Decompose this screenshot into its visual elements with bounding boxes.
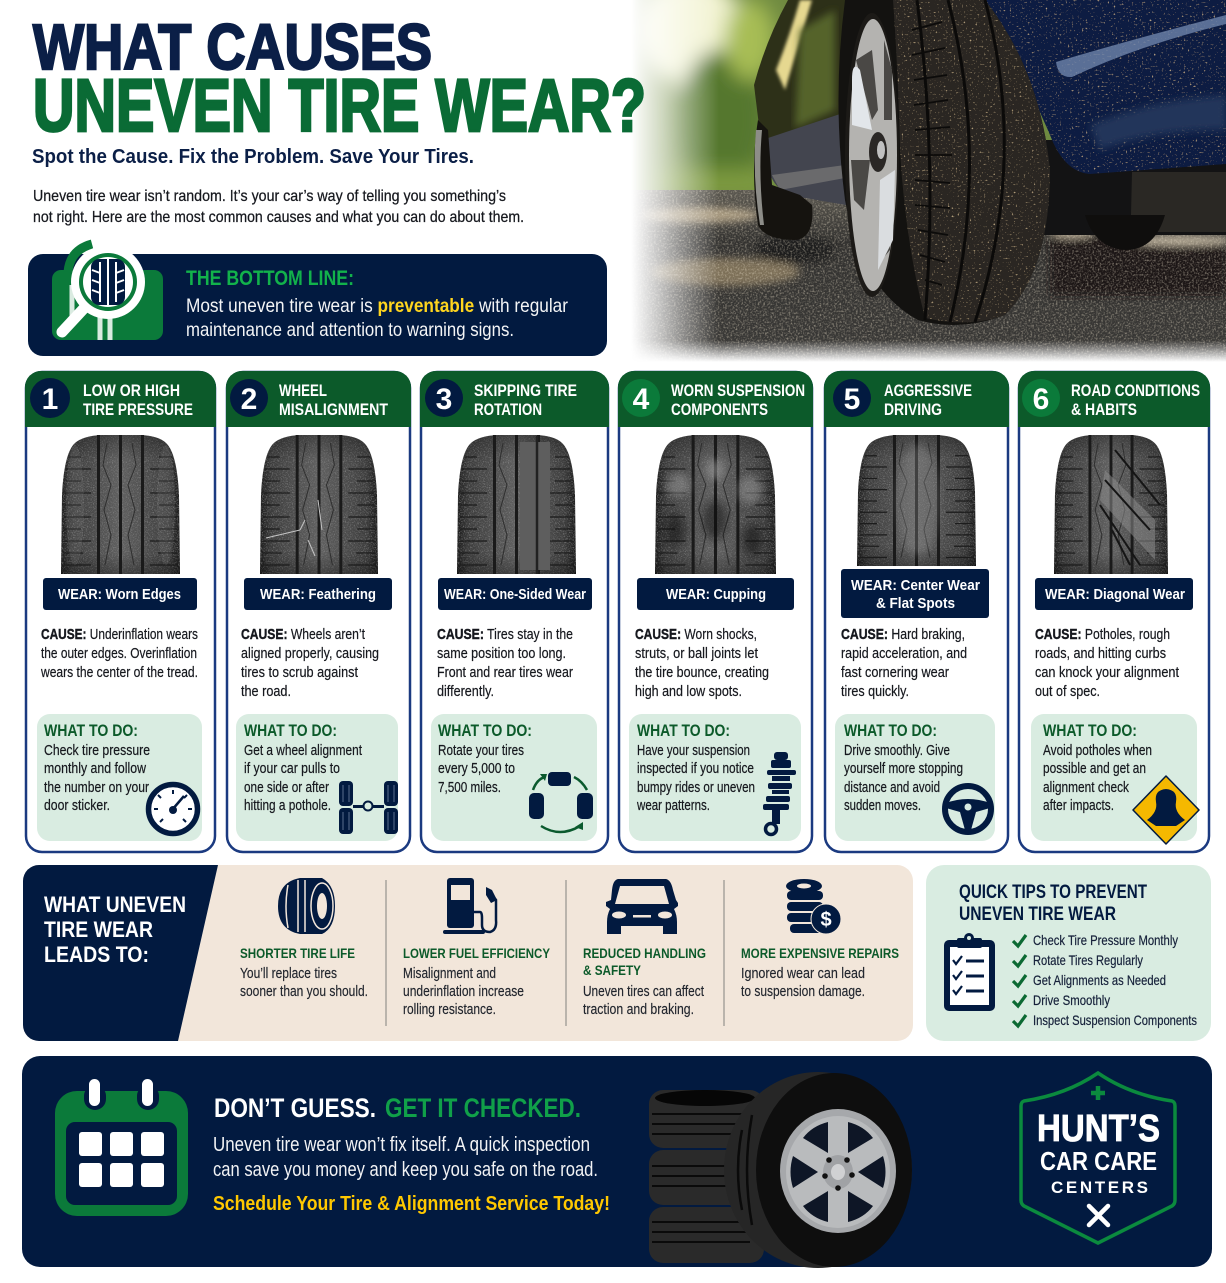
reduced handling and safety: & SAFETY <box>583 962 642 978</box>
tips list: Drive Smoothly <box>1033 992 1110 1008</box>
cause text: fast cornering wear <box>841 665 949 681</box>
number badge: 6 <box>1033 383 1049 416</box>
wear label: WEAR: Feathering <box>260 586 376 603</box>
cause text: struts, or ball joints let <box>635 646 758 662</box>
number badge: 1 <box>42 383 58 416</box>
what to do: distance and avoid <box>844 780 940 796</box>
icon: pothole warning sign <box>1133 776 1199 844</box>
number badge <box>833 379 871 417</box>
wear label <box>244 578 392 610</box>
shorter tire life <box>240 945 368 1000</box>
cta text <box>213 1134 598 1181</box>
lower fuel efficiency: underinflation increase <box>403 984 524 1000</box>
cta schedule line: Schedule Your Tire & Alignment Service Today! <box>213 1193 610 1215</box>
panel: cause 5 aggressive driving <box>824 371 1009 852</box>
what to do <box>629 714 801 841</box>
cause text: tires to scrub against <box>241 665 358 681</box>
heading: WHEEL <box>279 381 327 400</box>
fender <box>985 0 1226 174</box>
front tire <box>838 0 1050 325</box>
bottom line text: maintenance and attention to warning signs. <box>186 319 514 341</box>
tire photo: center wear <box>857 435 976 566</box>
icon: clipboard <box>944 933 995 1011</box>
wear label: WEAR: Worn Edges <box>58 586 181 603</box>
quick tips heading: QUICK TIPS TO PREVENT <box>959 882 1147 903</box>
what to do: after impacts. <box>1043 798 1114 814</box>
leads to heading <box>44 892 186 967</box>
cause text <box>841 627 967 700</box>
heading: SKIPPING TIRE <box>474 381 577 400</box>
tire photo: feathering <box>260 435 378 574</box>
wear label: & Flat Spots <box>876 595 955 612</box>
heading: ROTATION <box>474 400 542 419</box>
hero photo: car tire on road <box>600 0 1226 364</box>
tire photo: one-sided wear <box>457 435 576 574</box>
what to do: the number on your <box>44 780 149 796</box>
more expensive repairs: Ignored wear can lead <box>741 966 865 982</box>
lower fuel efficiency <box>403 945 551 1018</box>
panel: cause 3 skipping tire rotation <box>420 371 609 852</box>
cause text <box>437 627 573 700</box>
what to do: if your car pulls to <box>244 761 340 777</box>
what to do: inspected if you notice <box>637 761 754 777</box>
heading <box>279 381 389 419</box>
what to do <box>1031 714 1197 841</box>
panel: quick tips <box>926 865 1211 1041</box>
wear label <box>1035 578 1193 610</box>
logo: hunt's car care centers: CAR CARE <box>1040 1146 1157 1176</box>
what to do: Get a wheel alignment <box>244 743 362 759</box>
cause text: the outer edges. Overinflation <box>41 646 197 662</box>
lower fuel efficiency: rolling resistance. <box>403 1002 496 1018</box>
reduced handling and safety: REDUCED HANDLING <box>583 945 706 961</box>
what to do: 7,500 miles. <box>438 780 501 796</box>
leads to heading: TIRE WEAR <box>44 917 153 942</box>
tips list <box>1013 932 1197 1028</box>
cause text: roads, and hitting curbs <box>1035 646 1166 662</box>
what to do: bumpy rides or uneven <box>637 780 755 796</box>
what to do: WHAT TO DO: <box>438 722 532 740</box>
tire photo: diagonal wear <box>1054 435 1168 574</box>
logo: hunt's car care centers: CENTERS <box>1051 1178 1148 1197</box>
heading <box>83 381 193 419</box>
lower fuel efficiency: LOWER FUEL EFFICIENCY <box>403 945 551 961</box>
panel: cause 1 low or high tire pressure <box>25 371 216 852</box>
bottom line text <box>186 295 568 341</box>
cause text: CAUSE: Tires stay in the <box>437 627 573 643</box>
cause text: can knock your alignment <box>1035 665 1179 681</box>
what to do: yourself more stopping <box>844 761 963 777</box>
title: UNEVEN TIRE WEAR? <box>33 64 646 147</box>
rear of car <box>754 0 845 138</box>
icon: tires and dollar: $ <box>820 909 832 931</box>
wear label <box>43 578 197 610</box>
number badge <box>622 379 660 417</box>
tips list: Rotate Tires Regularly <box>1033 952 1143 968</box>
cause text: tires quickly. <box>841 684 909 700</box>
alloy wheel <box>780 1109 896 1233</box>
what to do: WHAT TO DO: <box>637 722 730 740</box>
what to do <box>37 714 202 841</box>
wheel rim <box>845 13 899 297</box>
what to do: WHAT TO DO: <box>244 722 337 740</box>
heading <box>474 381 577 419</box>
lower fuel efficiency: Misalignment and <box>403 966 496 982</box>
cause text: rapid acceleration, and <box>841 646 967 662</box>
what to do: WHAT TO DO: <box>844 722 937 740</box>
what to do: one side or after <box>244 780 329 796</box>
what to do: WHAT TO DO: <box>1043 722 1137 740</box>
more expensive repairs: to suspension damage. <box>741 984 865 1000</box>
icon: worn tire <box>278 878 335 934</box>
wear label: WEAR: One-Sided Wear <box>444 586 586 603</box>
what to do: wear patterns. <box>636 798 710 814</box>
number badge: 5 <box>844 383 860 416</box>
icon: crossed tools <box>1089 1206 1108 1225</box>
heading: MISALIGNMENT <box>279 400 389 419</box>
number badge <box>230 379 268 417</box>
cause text: the tire bounce, creating <box>635 665 769 681</box>
cause text: CAUSE: Potholes, rough <box>1035 627 1170 643</box>
number badge <box>1022 379 1060 417</box>
number badge: 3 <box>436 383 452 416</box>
cause text <box>40 627 198 681</box>
number badge <box>425 379 463 417</box>
what to do: Avoid potholes when <box>1043 743 1152 759</box>
cause text: CAUSE: Wheels aren’t <box>241 627 365 643</box>
wear label: WEAR: Diagonal Wear <box>1045 586 1185 603</box>
quick tips heading: UNEVEN TIRE WEAR <box>959 904 1116 925</box>
icon: fuel pump <box>443 878 497 934</box>
cause text <box>241 627 379 700</box>
cause text: same position too long. <box>437 646 566 662</box>
shorter tire life: You’ll replace tires <box>240 966 337 982</box>
what to do: Have your suspension <box>637 743 750 759</box>
wear label <box>438 578 592 610</box>
shorter tire life: sooner than you should. <box>240 984 368 1000</box>
cause text: out of spec. <box>1035 684 1100 700</box>
title: WHAT CAUSES <box>33 11 432 83</box>
cause text: the road. <box>241 684 291 700</box>
heading <box>884 381 972 419</box>
what to do: Rotate your tires <box>438 743 524 759</box>
heading: LOW OR HIGH <box>83 381 180 400</box>
cta text: can save you money and keep you safe on the road. <box>213 1159 598 1181</box>
leads to heading: WHAT UNEVEN <box>44 892 186 917</box>
cta heading <box>214 1093 581 1123</box>
title <box>33 11 646 147</box>
number badge: 4 <box>633 383 650 416</box>
icon: magnifier over tire <box>52 244 163 340</box>
panel: cause 2 wheel misalignment <box>226 371 411 852</box>
wear label <box>841 569 989 618</box>
icon: steering wheel <box>945 786 991 832</box>
what to do: alignment check <box>1043 780 1130 796</box>
cta text: Uneven tire wear won’t fix itself. A quick inspection <box>213 1134 590 1156</box>
bottom line text: Most uneven tire wear is preventable with regular <box>186 295 568 317</box>
what to do <box>431 714 597 841</box>
cause text: CAUSE: Worn shocks, <box>635 627 757 643</box>
cause text: differently. <box>437 684 494 700</box>
logo: hunt's car care centers: HUNT’S <box>1037 1108 1160 1150</box>
panel: what uneven tire wear leads to <box>23 865 913 1041</box>
heading: DRIVING <box>884 400 942 419</box>
cause text: CAUSE: Hard braking, <box>841 627 965 643</box>
wear label: WEAR: Center Wear <box>851 577 980 594</box>
icon: suspension shock <box>763 752 796 834</box>
heading: WORN SUSPENSION <box>671 381 805 400</box>
what to do <box>236 714 398 841</box>
icon: tire pressure gauge <box>148 784 198 834</box>
number badge <box>30 378 70 418</box>
panel: cause 4 worn suspension components <box>618 371 813 852</box>
what to do: WHAT TO DO: <box>44 722 138 740</box>
intro text: Uneven tire wear isn’t random. It’s your car’s way of telling you something’s <box>33 188 506 205</box>
panel: call to action <box>22 1056 1212 1268</box>
cause text: CAUSE: Underinflation wears <box>41 627 198 643</box>
what to do: monthly and follow <box>44 761 146 777</box>
tips list: Get Alignments as Needed <box>1033 972 1166 988</box>
reduced handling and safety: traction and braking. <box>583 1002 694 1018</box>
wear label: WEAR: Cupping <box>666 586 766 603</box>
what to do: door sticker. <box>44 798 110 814</box>
what to do: hitting a pothole. <box>244 798 331 814</box>
number badge: 2 <box>241 383 257 416</box>
panel: cause 6 road conditions and habits <box>1018 371 1210 852</box>
intro text: not right. Here are the most common causes and what you can do about them. <box>33 209 524 226</box>
what to do: Drive smoothly. Give <box>844 743 950 759</box>
heading: TIRE PRESSURE <box>83 400 193 419</box>
icon: tires and dollar <box>786 879 841 934</box>
heading: AGGRESSIVE <box>884 381 972 400</box>
what to do: sudden moves. <box>844 798 921 814</box>
icon: tire rotation <box>529 772 593 832</box>
cause text: wears the center of the tread. <box>40 665 198 681</box>
icon: car front <box>606 879 678 934</box>
far side under car <box>1040 140 1226 235</box>
icon: wheel axle <box>339 781 398 834</box>
cause text: Front and rear tires wear <box>437 665 573 681</box>
what to do: Check tire pressure <box>44 743 150 759</box>
tire photo: cupping <box>655 435 776 574</box>
heading: & HABITS <box>1071 400 1137 419</box>
cause text <box>635 627 769 700</box>
bottom line heading: THE BOTTOM LINE: <box>186 267 354 290</box>
cause text: aligned properly, causing <box>241 646 379 662</box>
tire stack photo <box>649 1072 912 1268</box>
more expensive repairs <box>741 945 899 1000</box>
cause text: high and low spots. <box>635 684 742 700</box>
reduced handling and safety <box>583 945 706 1018</box>
what to do <box>835 714 995 841</box>
cause text <box>1035 627 1179 700</box>
tire photo: worn edges <box>61 435 180 574</box>
what to do: possible and get an <box>1043 761 1146 777</box>
subtitle: Spot the Cause. Fix the Problem. Save Your Tires. <box>32 145 474 168</box>
cta heading: DON’T GUESS. <box>214 1093 376 1123</box>
reduced handling and safety: Uneven tires can affect <box>583 984 704 1000</box>
what to do: every 5,000 to <box>438 761 515 777</box>
heading <box>671 381 805 419</box>
wear label <box>637 578 794 610</box>
heading: COMPONENTS <box>671 400 768 419</box>
heading <box>1071 381 1200 419</box>
icon: calendar <box>55 1079 188 1216</box>
logo: hunt's car care centers <box>1021 1073 1175 1243</box>
more expensive repairs: MORE EXPENSIVE REPAIRS <box>741 945 899 961</box>
panel: the bottom line <box>28 244 607 356</box>
leads to heading: LEADS TO: <box>44 942 149 967</box>
cta heading: GET IT CHECKED. <box>385 1093 581 1123</box>
intro text <box>33 188 524 226</box>
shorter tire life: SHORTER TIRE LIFE <box>240 945 355 961</box>
quick tips heading <box>959 882 1147 925</box>
tips list: Check Tire Pressure Monthly <box>1033 932 1178 948</box>
